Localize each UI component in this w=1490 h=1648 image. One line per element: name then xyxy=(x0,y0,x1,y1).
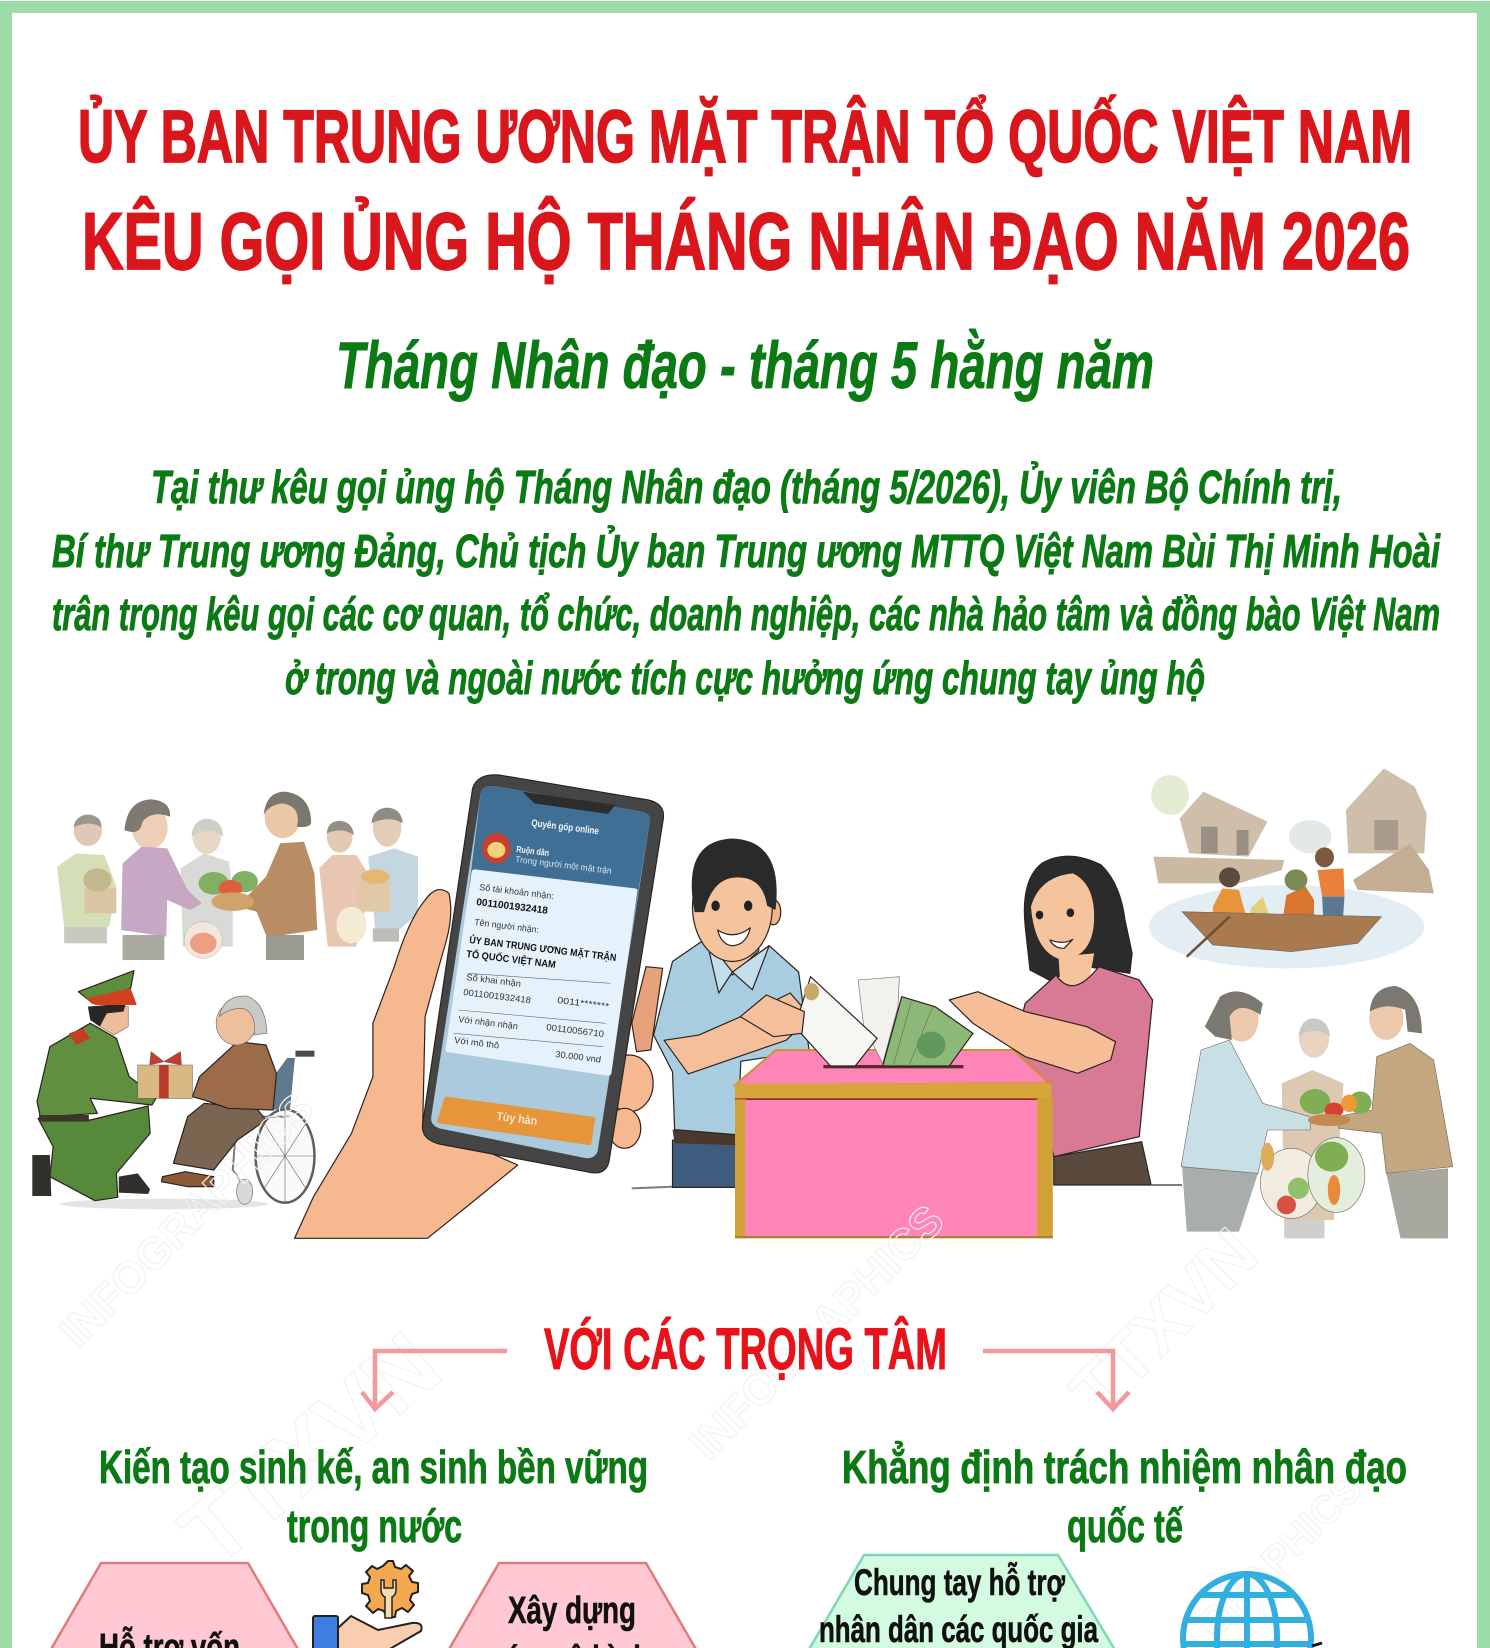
phone screen text xyxy=(454,818,617,1128)
illustration: left half xyxy=(32,775,675,1238)
left column heading xyxy=(99,1441,648,1552)
illustration: donation envelope, paper and money xyxy=(795,977,973,1066)
illustration: donation box lid xyxy=(735,1050,1049,1085)
illustration: man donor xyxy=(654,839,811,1187)
phone screen text: Với mô thô xyxy=(454,1035,500,1050)
illustration: man's hand on envelope xyxy=(740,995,804,1037)
phone screen text: 30.000 vnd xyxy=(555,1049,602,1065)
illustration: officer giving gift to elderly woman xyxy=(32,971,314,1209)
phone screen text: Quyên góp online xyxy=(531,818,600,837)
illustration: donation box front xyxy=(735,1083,1053,1238)
arrow: left branch xyxy=(362,1351,507,1409)
subtitle: Tháng Nhân đạo - tháng 5 hằng năm xyxy=(336,328,1154,402)
card: building models xyxy=(437,1563,711,1648)
watermarks: GRAPHICS xyxy=(1190,1466,1371,1646)
card: building models: Xây dựng xyxy=(508,1590,636,1632)
illustration: community group sharing food xyxy=(57,792,418,960)
phone screen text: Số tài khoản nhận: xyxy=(479,882,554,901)
section heading: VỚI CÁC TRỌNG TÂM xyxy=(544,1317,947,1382)
illustration: flood relief boat scene xyxy=(1149,768,1434,968)
phone screen text: Với nhận nhận xyxy=(458,1014,519,1031)
right column heading xyxy=(842,1440,1407,1552)
illustration: woman's arm xyxy=(949,992,1116,1073)
icon: hand with gear and wrench xyxy=(313,1561,422,1648)
watermarks xyxy=(50,1084,1371,1646)
phone screen text: 0011******* xyxy=(557,995,610,1011)
title xyxy=(78,95,1412,287)
illustration: neighbours handing over vegetables xyxy=(1181,986,1453,1238)
illustration: right half xyxy=(735,768,1453,1238)
phone screen text: TỔ QUỐC VIỆT NAM xyxy=(466,946,557,971)
phone screen text: ỦY BAN TRUNG ƯƠNG MẶT TRẬN xyxy=(469,933,617,964)
illustration: hand holding phone xyxy=(294,775,663,1238)
phone screen text: Số khai nhận xyxy=(466,972,522,989)
watermarks: TTXVN xyxy=(162,1313,459,1585)
phone screen text: Tên người nhận: xyxy=(474,917,539,935)
ground line xyxy=(632,1187,675,1188)
phone screen text: 00110056710 xyxy=(546,1022,605,1039)
right column heading: quốc tế xyxy=(1067,1500,1183,1552)
card: international support: Chung tay hỗ trợ xyxy=(854,1562,1065,1603)
illustration: woman donor xyxy=(1013,856,1153,1185)
watermarks: INFOGRAPHICS xyxy=(50,1084,324,1357)
ground line xyxy=(1151,1184,1182,1186)
card: capital support xyxy=(39,1563,313,1648)
watermarks: TTXVN xyxy=(1055,1213,1273,1431)
phone screen text: Tùy hàn xyxy=(496,1109,538,1128)
left column heading: Kiến tạo sinh kế, an sinh bền vững xyxy=(99,1441,648,1493)
phone screen text: 0011001932418 xyxy=(463,987,531,1005)
phone screen text: 0011001932418 xyxy=(476,897,549,917)
intro paragraph xyxy=(52,461,1441,704)
arrow: right branch xyxy=(983,1351,1129,1409)
watermarks: INFOGRAPHICS xyxy=(680,1196,954,1469)
left column heading: trong nước xyxy=(287,1500,462,1552)
card: international support xyxy=(797,1555,1130,1648)
phone screen text: Ruộn dân xyxy=(516,844,550,858)
icon: globe xyxy=(1183,1574,1322,1648)
phone screen text: Trong người một mặt trận xyxy=(515,854,612,876)
